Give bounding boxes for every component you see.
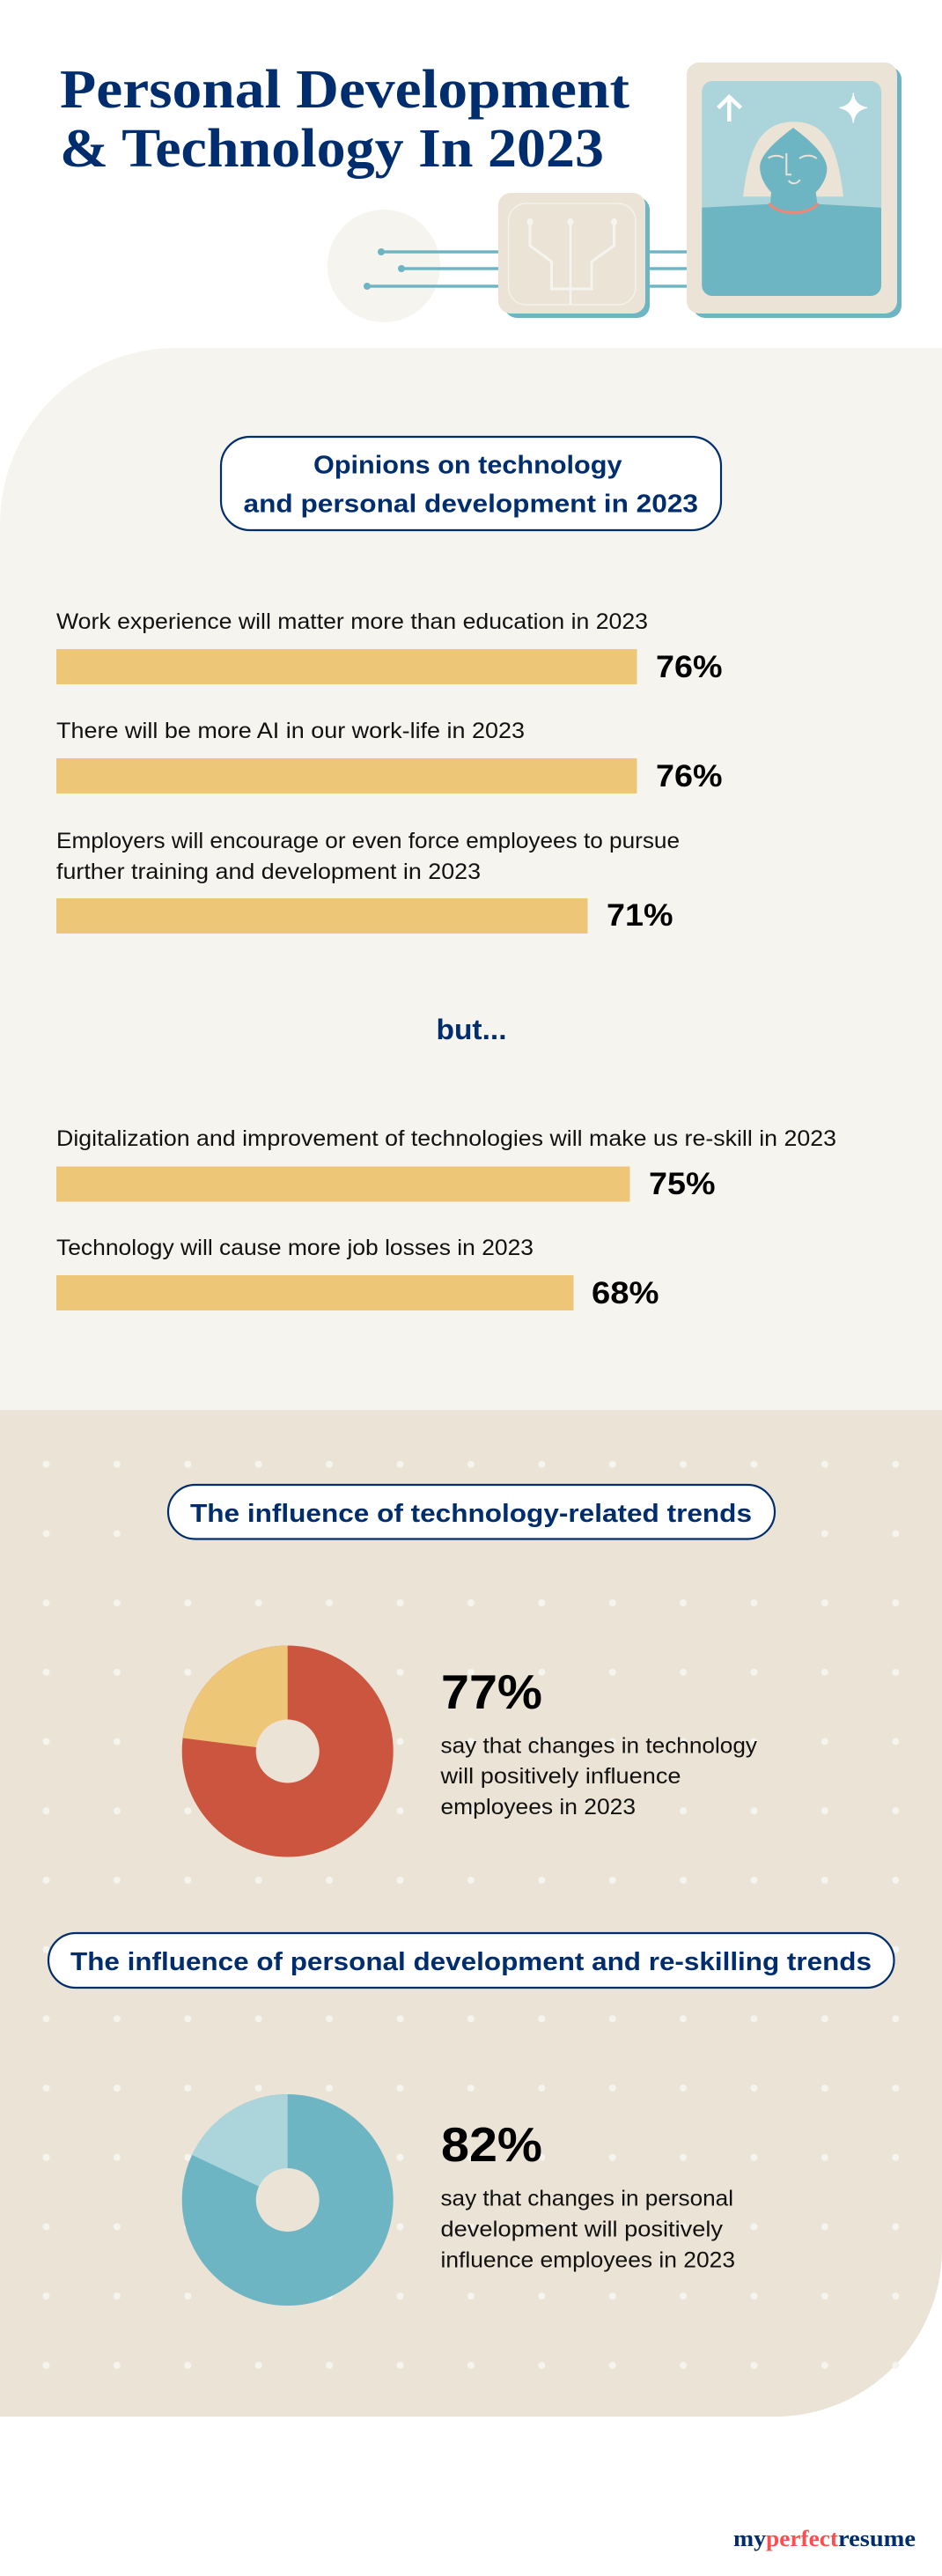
title: Personal Development (60, 60, 629, 120)
pie chart: 82% (182, 2094, 394, 2306)
text: but: but... (437, 1014, 507, 1045)
header (60, 60, 902, 322)
stat: 82%: 82% (441, 2117, 542, 2172)
face (760, 128, 827, 208)
connector lines (364, 248, 688, 290)
bar: more AI 76%: 76% (656, 759, 722, 793)
stat: 77%: will positively influence (439, 1764, 681, 1789)
logo: my (733, 2526, 766, 2551)
bar: work experience 76% (56, 609, 722, 684)
bar: employers training 71%: further training and development in 2023 (56, 860, 481, 884)
heading: technology trends (168, 1485, 775, 1539)
heading: opinions: Opinions on technology (313, 451, 622, 479)
bar: more AI 76%: There will be more AI in our work-life in 2023 (56, 719, 525, 743)
pie chart: 77% (182, 1645, 394, 1856)
stat: 82%: development will positively (440, 2218, 724, 2242)
necklace (769, 203, 818, 213)
stat: 77% (439, 1664, 758, 1819)
heading: opinions: and personal development in 2023 (243, 490, 698, 518)
bar: employers training 71%: 71% (607, 898, 673, 933)
bar: re-skill 75%: 75% (649, 1167, 715, 1201)
hair (743, 122, 843, 196)
icon: up arrow (718, 97, 741, 122)
portrait card (687, 63, 902, 318)
stat: 82%: say that changes in personal (440, 2186, 733, 2211)
logo (733, 2526, 916, 2551)
bar: job losses 68% (56, 1236, 659, 1310)
panel: influence of trends (0, 1410, 942, 2417)
stat: 82%: influence employees in 2023 (440, 2248, 735, 2272)
bar: work experience 76%: 76% (656, 650, 722, 684)
stat: 77%: employees in 2023 (440, 1795, 636, 1819)
bar: re-skill 75%: Digitalization and improvement of technologies will make us re-skill in 2023 (56, 1126, 836, 1151)
bar: employers training 71%: Employers will encourage or even force employees to pursue (56, 829, 680, 853)
bar: re-skill 75% (56, 1126, 836, 1201)
body (702, 204, 881, 296)
heading: opinions (221, 437, 721, 530)
facial features (769, 153, 817, 183)
circuit card (498, 193, 650, 318)
bar: employers training 71% (56, 829, 680, 934)
heading: personal development trends (48, 1933, 894, 1988)
heading: technology trends: The influence of technology-related trends (190, 1500, 752, 1528)
bar: job losses 68%: 68% (592, 1276, 659, 1310)
stat: 77%: 77% (441, 1664, 542, 1719)
bar: more AI 76% (56, 719, 722, 793)
logo: perfect (766, 2526, 838, 2551)
logo: resume (838, 2526, 916, 2551)
stat: 82% (440, 2117, 735, 2272)
title (60, 60, 629, 179)
stat: 77%: say that changes in technology (440, 1733, 758, 1758)
bar: job losses 68%: Technology will cause more job losses in 2023 (56, 1236, 534, 1260)
bar: work experience 76%: Work experience will matter more than education in 2023 (56, 609, 648, 634)
heading: personal development trends: The influence of personal development and re-skilling trends (70, 1948, 872, 1976)
title: & Technology In 2023 (60, 119, 604, 179)
icon: sparkle (840, 93, 867, 123)
panel: opinions on technology (0, 348, 942, 1410)
illustration: circuit connecting to portrait card (327, 63, 902, 322)
